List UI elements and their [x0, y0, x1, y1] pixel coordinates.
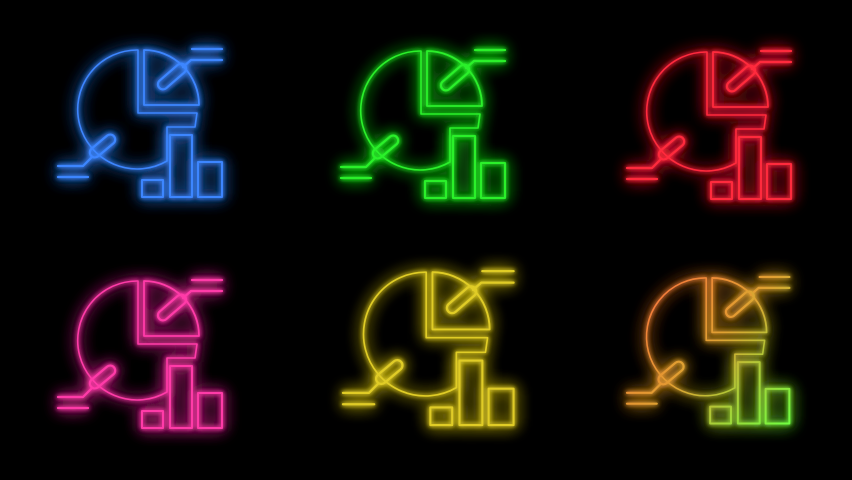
icon: green chart	[341, 50, 505, 198]
icon: pink chart	[58, 280, 222, 428]
icon: orange-green chart	[627, 277, 789, 423]
icon: blue chart	[58, 49, 222, 197]
icon: red chart	[627, 51, 791, 199]
icon: yellow chart	[343, 271, 514, 425]
